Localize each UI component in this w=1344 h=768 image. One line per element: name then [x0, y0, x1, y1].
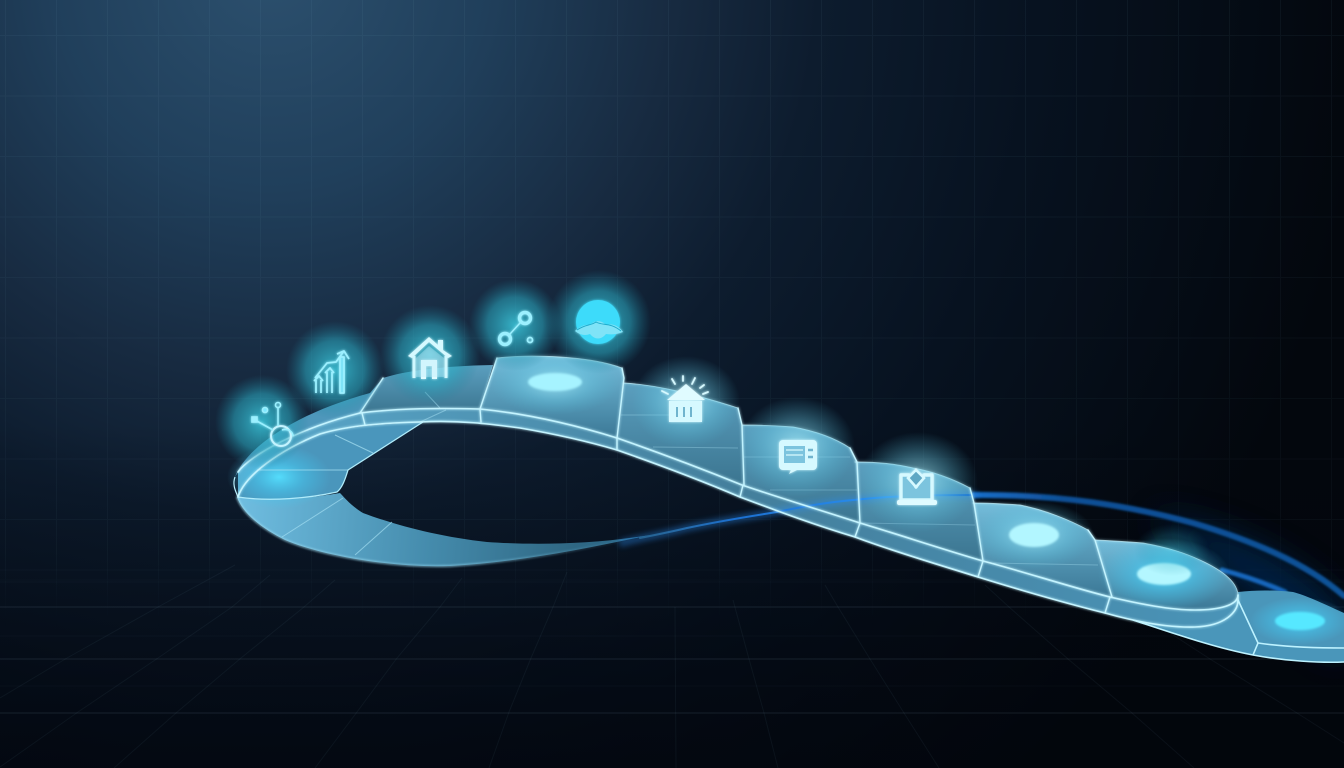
panel 7: glowing disc step	[973, 501, 1112, 597]
icon halos above the ribbon	[215, 270, 1210, 576]
light trail: blue streak crossing the ribbon	[622, 495, 975, 543]
panel 9: far-right lower panel	[1133, 590, 1344, 662]
icon: rising bar chart	[314, 351, 349, 393]
icon: network node	[252, 402, 293, 446]
icon: globe with clouds	[575, 300, 623, 344]
panel 5: message step	[742, 425, 860, 523]
panel 3: glowing disc step	[480, 351, 624, 438]
panel 8: large glowing disc step	[1095, 538, 1238, 610]
ribbon thickness strip	[238, 408, 1238, 627]
panel 1: back band of the left curve	[234, 378, 383, 497]
icon: bank with rays	[662, 376, 708, 422]
icon: message card	[779, 440, 817, 474]
light trail: blue arc behind the ribbon	[973, 495, 1344, 660]
left end disc	[227, 422, 423, 509]
icon: house	[408, 337, 452, 379]
panel 2: house step	[360, 365, 493, 422]
panel 4: bank step	[617, 383, 744, 485]
panel 6: mail step	[855, 462, 983, 561]
ribbon edge lines	[238, 356, 1238, 627]
lower ribbon loop	[237, 493, 650, 566]
icon: linked nodes	[500, 312, 532, 344]
icon: mail on stand	[897, 470, 937, 505]
floor grid	[0, 565, 1344, 768]
